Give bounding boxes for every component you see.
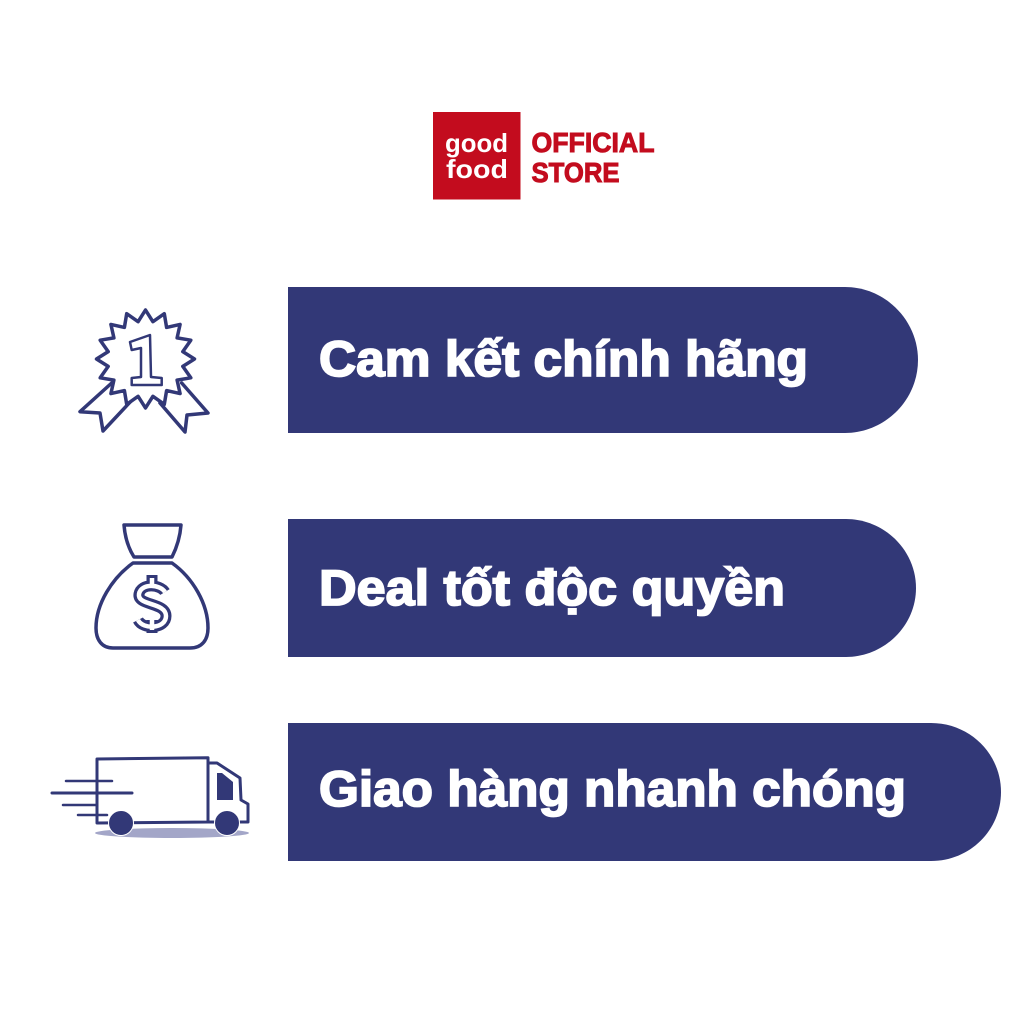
truck body — [97, 758, 248, 823]
icon: number one award rosette — [80, 310, 208, 432]
row 3: fast delivery — [52, 723, 1001, 861]
logo word: good: good — [445, 128, 508, 158]
truck window — [217, 773, 233, 800]
logo red square — [433, 112, 520, 200]
truck wheels — [108, 810, 240, 836]
icon: money bag — [96, 525, 208, 648]
truck speed lines — [52, 781, 132, 815]
row 2: exclusive deals — [96, 519, 916, 657]
banner text: Deal tốt độc quyền — [319, 560, 785, 616]
logo word: food: food — [446, 154, 508, 184]
logo caption: official: OFFICIAL — [532, 127, 654, 158]
banner text: Cam kết chính hãng — [319, 331, 808, 387]
banner: cam ket chinh hang — [288, 287, 918, 433]
logo caption: store: STORE — [532, 157, 620, 188]
row 1: authentic guarantee — [80, 287, 918, 433]
icon: delivery truck — [52, 758, 249, 838]
banner text: Giao hàng nhanh chóng — [319, 761, 906, 817]
banner: giao hang nhanh chong — [288, 723, 1001, 861]
banner: deal tot doc quyen — [288, 519, 916, 657]
truck ground shadow — [95, 828, 249, 838]
logo: good food official store — [433, 112, 654, 200]
